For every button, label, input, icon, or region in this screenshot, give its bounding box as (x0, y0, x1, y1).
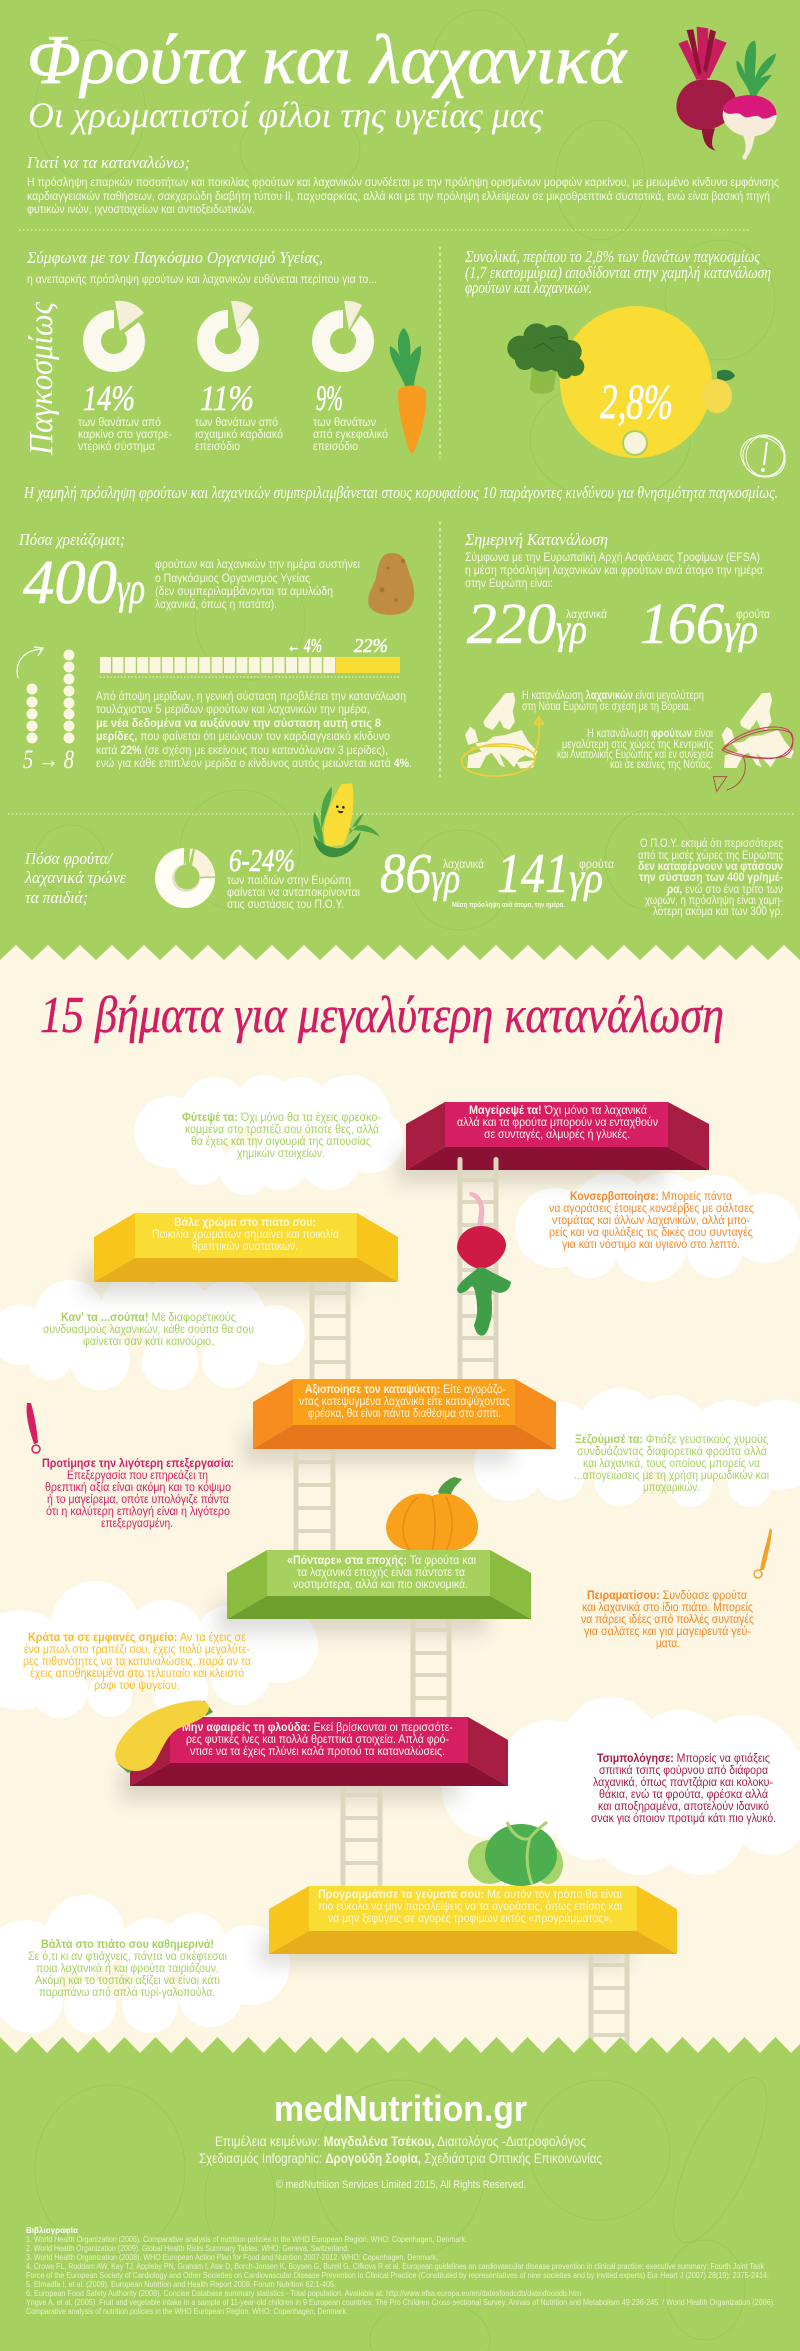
caption 14%: ντερικό σύστημα (78, 439, 155, 453)
cloud: juice (474, 1388, 800, 1507)
platform: keep the skin: Μην αφαιρείς τη φλούδα: Εκεί βρίσκονται οι περισσότε- (182, 1722, 453, 1734)
text: less processing: επεξεργασμένη. (101, 1518, 173, 1530)
map text: vegetables (522, 688, 704, 713)
footer: brand: medNutrition.gr (274, 2088, 527, 2129)
platform: colour on plate: Βάλε χρώμα στο πιάτο σου: (174, 1217, 316, 1229)
icon: broccoli (507, 323, 584, 394)
text: snack: Τσιμπολόγησε: Μπορείς να φτιάξεις (597, 1753, 770, 1765)
text: experiment: για σαλάτες και για μαγειρευτά γεύ- (584, 1626, 751, 1638)
recommendation text: ο Παγκόσμιος Οργανισμός Υγείας (155, 571, 310, 585)
stat 220 g vegetables (467, 591, 607, 656)
portions paragraph: ενώ για κάθε επιπλέον μερίδα ο κίνδυνος αυτός μειώνεται κατά 4%. (96, 756, 412, 770)
text: preserve (549, 1191, 754, 1251)
stat 86 g vegetables: 86 (380, 843, 431, 905)
icon: beet and radish (676, 27, 777, 160)
small note: Μέση πρόσληψη ανά άτομο, την ημέρα. (452, 901, 565, 909)
bibliography: Comparative analysis of nutrition policies in the WHO European Region. WHO: Copenhagen, Denmark. (26, 2307, 348, 2316)
text: plant them: θα έχεις και την σιγουριά της απουσίας (191, 1136, 371, 1148)
recommendation text (155, 557, 360, 611)
platform: plan meals: Προγραμμάτισε τα γεύματά σου: Με αυτόν τον τρόπο θα είναι (318, 1889, 622, 1901)
text: experiment: ματα. (656, 1638, 680, 1650)
heading: Πόσα φρούτα/ (24, 849, 114, 868)
text: less processing: Προτίμησε την λιγότερη επεξεργασία: (42, 1458, 234, 1470)
intro paragraph: φυτικών ινών, ιχνοστοιχείων και αντιοξειδωτικών. (27, 202, 255, 216)
text: plant them: κομμένα στο τραπέζι σου όποτε θες, αλλά (185, 1124, 379, 1136)
stat 2,8%: 2,8% (600, 373, 673, 429)
stat 220 g vegetables: 220 (467, 591, 556, 656)
icon: pumpkin (386, 1477, 478, 1552)
text: soup: συνδυασμούς λαχανικών, κάθε σούπα θα σου (43, 1324, 254, 1336)
map text: fruit (557, 726, 713, 771)
caption children: στις συστάσεις του Π.Ο.Υ. (227, 897, 344, 911)
icon: curved arrow (17, 647, 43, 678)
caption 14%: των θανάτων από (78, 415, 161, 429)
intro text (465, 550, 763, 590)
panel: WHO global burden (23, 248, 426, 456)
cloud: keep visible (0, 1581, 318, 1718)
platform: cook: σε συνταγές, αλμυρές ή γλυκές. (484, 1129, 630, 1141)
intro paragraph (27, 175, 779, 216)
stat 166 g fruit: γρ (724, 607, 758, 653)
heading (24, 849, 126, 907)
text: snack: σπιτικά τσιπς φούρνου από διάφορα (599, 1765, 768, 1777)
bibliography: 5. Elmadfa I, et al. (2009). European Nutrition and Health Report 2009. Forum Nutrition 62:1-405. (26, 2280, 336, 2289)
yellow circle chart (560, 306, 712, 458)
text: juice: μπαχαρικών. (643, 1482, 700, 1494)
platform: freezer (253, 1379, 556, 1449)
portions paragraph: κατά 22% (σε σχέση με εκείνους που κατανάλωναν 3 μερίδες), (96, 743, 388, 757)
caption 11%: των θανάτων από (195, 415, 278, 429)
intro text: η μέση πρόσληψη λαχανικών και φρούτων ανά άτομο την ημέρα (465, 563, 763, 577)
text: experiment: Πειραματίσου: Συνδύασε φρούτα (587, 1590, 747, 1602)
stat 86 g vegetables: λαχανικά (443, 857, 484, 871)
footer: credits (199, 2133, 602, 2166)
platform: colour on plate: θρεπτικών συστατικών. (192, 1241, 298, 1253)
WHO estimate text (638, 836, 783, 918)
stat 166 g fruit: φρούτα (736, 607, 770, 621)
text: on the plate daily: Σε ό,τι κι αν φτιάχνεις, πάντα να σκέφτεσαι (28, 1951, 227, 1963)
stat 400 g: 400 (23, 549, 117, 617)
text: snack: λαχανικά, όπως παντζάρια και κολοκυ- (593, 1777, 773, 1789)
ladder 4 (410, 1608, 452, 1718)
stat 166 g fruit: 166 (640, 591, 724, 656)
portions paragraph: μερίδες, που φαίνεται ότι μειώνουν τον καρδιαγγειακό κίνδυνο (96, 729, 390, 743)
recommendation text: φρούτων και λαχανικών την ημέρα συστήνει (155, 557, 360, 571)
text: soup: Καν' τα ...σούπα! Με διαφορετικούς (61, 1312, 236, 1324)
portions paragraph: Από άποψη μερίδων, η γενική σύσταση προβλέπει την κατανάλωση (96, 689, 406, 703)
label: 22%: 22% (354, 635, 388, 657)
caption 11%: επεισόδιο (195, 439, 240, 453)
text: less processing: ότι η καλύτερη επιλογή είναι η λιγότερο (46, 1506, 230, 1518)
donut 9% (321, 301, 365, 363)
icon: lemon (702, 370, 735, 413)
title: Φρούτα και λαχανικά (27, 22, 627, 99)
cloud: plant them (134, 1075, 403, 1195)
text: preserve: να αγοράσεις έτοιμες κονσέρβες με σάλτσες (549, 1203, 754, 1215)
label: minus 4%: ← 4% (287, 635, 322, 657)
text: preserve: ρείς και να φυλάξεις τις δικές σου συνταγές (549, 1227, 753, 1239)
ladder 5 (340, 1772, 382, 1887)
text: plant them: χημικών στοιχείων. (237, 1148, 325, 1160)
caption 14% (78, 415, 172, 453)
caption children (227, 873, 360, 911)
stat 86 g vegetables (380, 843, 484, 905)
icon: carrot (390, 328, 426, 453)
stat 166 g fruit (640, 591, 770, 656)
platform: plan meals: να μην ξεφύγεις σε αγορές τροφίμων εκτός «προγράμματος». (328, 1913, 612, 1925)
text: less processing: Επεξεργασία που επηρεάζει τη (67, 1470, 208, 1482)
panel: current consumption (461, 530, 794, 792)
bibliography: Βιβλιογραφία (26, 2225, 79, 2235)
text: soup (43, 1312, 254, 1348)
steps section: clouds, platforms and ladders (0, 1075, 800, 2055)
panel: 2.8% of deaths (464, 247, 792, 485)
text: on the plate daily: παραπάνω από απλά τυρί-γαλοπούλα. (39, 1987, 215, 1999)
stat 86 g vegetables: γρ (431, 856, 460, 902)
stat 6-24%: 6-24% (229, 842, 295, 878)
stat 141 g fruit: φρούτα (579, 857, 614, 871)
vertical word: Παγκοσμίως (23, 302, 60, 456)
map text: fruit: μεγαλύτερη στις χώρες της Κεντρικής (562, 737, 713, 751)
text: plant them (182, 1112, 381, 1160)
subtitle: Οι χρωματιστοί φίλοι της υγείας μας (28, 95, 543, 135)
icon: corn (313, 783, 380, 857)
heading: why eat them: Γιατί να τα καταναλώνω; (26, 153, 190, 172)
stat 141 g fruit: γρ (569, 856, 603, 902)
footer green background with zigzag (0, 2037, 800, 2351)
text: snack: και αποξηραμένα, αποτελούν ιδανικό (598, 1801, 769, 1813)
platform: cook (406, 1102, 709, 1170)
stat 141 g fruit: 141 (497, 843, 569, 905)
stat 400 g: γρ (117, 564, 145, 613)
icon: potato (368, 553, 414, 615)
subheading: η ανεπαρκής πρόσληψη φρούτων και λαχανικών ευθύνεται περίπου για το... (27, 272, 377, 286)
caption 11%: ισχαιμικό καρδιακό (195, 427, 283, 441)
background vegetable line art (35, 10, 775, 930)
panel: how much is needed (17, 530, 414, 774)
statement (464, 247, 771, 297)
platform: keep the skin (130, 1717, 508, 1786)
map text: fruit: Η κατανάλωση φρούτων είναι (587, 726, 713, 740)
progress bar (100, 657, 401, 677)
text: experiment: και λαχανικά στο ίδιο πιάτο. Μπορείς (582, 1602, 753, 1614)
ladder 3 (294, 1440, 336, 1552)
text: less processing (42, 1458, 234, 1530)
stat 9%: 9% (316, 378, 343, 418)
icon: scribbled exclamation (734, 429, 792, 485)
platform: seasonal (227, 1550, 531, 1619)
footer: copyright: © medNutrition Services Limited 2015, All Rights Reserved. (276, 2179, 526, 2191)
text: juice: συνδυάζοντας διαφορετικά φρούτα αλλά (577, 1446, 767, 1458)
ladder 1 (458, 1157, 498, 1381)
recommendation text: λαχανικά, όπως η πατάτα). (155, 597, 277, 611)
platform: seasonal: νοστιμότερα, αλλά και πιο οικονομικά. (293, 1579, 468, 1591)
WHO estimate text: ρα, ενώ στο ένα τρίτο των (667, 882, 783, 896)
caption 9%: των θανάτων (313, 415, 376, 429)
heading: Πόσα χρειάζομαι; (18, 530, 125, 549)
map: south Europe vegetables (461, 693, 543, 778)
text: keep visible: ρες πιθανότητες να τα καταναλώσεις, παρά αν τα (23, 1656, 251, 1668)
donut 14% (92, 301, 144, 363)
text: preserve: ντομάτας και άλλων λαχανικών, αλλά μπο- (552, 1215, 750, 1227)
text: plant them: Φύτεψέ τα: Όχι μόνο θα τα έχεις φρεσκο- (182, 1112, 381, 1124)
map: central and east Europe fruit (713, 693, 794, 792)
caption 14%: καρκίνο στο γαστρε- (78, 427, 172, 441)
cloud: preserve (515, 1173, 800, 1282)
caption 9%: επεισόδιο (313, 439, 358, 453)
ladder 2 (310, 1270, 350, 1382)
text: less processing: θρεπτική αξία είναι ακόμη και το κόψιμο (45, 1482, 231, 1494)
text: snack: σνακ για όποιον προτιμά κάτι πιο γλυκό. (591, 1813, 776, 1825)
text: on the plate daily: ποια λαχανικά ή και φρούτα ταιριάζουν. (36, 1963, 219, 1975)
intro text: Σύμφωνα με την Ευρωπαϊκή Αρχή Ασφάλειας Τροφίμων (EFSA) (465, 550, 760, 564)
bibliography: 3. World Health Organization (2008). WHO European Action Plan for Food and Nutrition 2007-2012. WHO: Copenhagen, Denmark. (26, 2253, 438, 2262)
caption 9% (313, 415, 388, 453)
footer: credits: Επιμέλεια κειμένων: Μαγδαλένα Τσέκου, Διαιτολόγος -Διατροφολόγος (215, 2133, 586, 2149)
panel: children (24, 783, 783, 918)
platform: freezer: Αξιοποίησε τον καταψύκτη: Είτε αγοράζο- (305, 1384, 506, 1396)
footer line art (35, 2066, 785, 2351)
platform: plan meals (269, 1886, 677, 1954)
cloud: soup (0, 1277, 305, 1390)
platform: colour on plate: Ποικιλία χρωμάτων σημαίνει και ποικιλία (152, 1229, 339, 1241)
stat 11%: 11% (200, 378, 254, 418)
green top background with zigzag edge (0, 0, 800, 960)
text: experiment (581, 1590, 754, 1650)
bibliography: 2. World Health Organization (2009). Global Health Risks Summary Tables. WHO: Geneva, Switzerland. (26, 2244, 349, 2253)
bibliography: 1. World Health Organization (2006). Comparative analysis of nutrition policies in the WHO European Region. WHO: Copenhagen, Denmark. (26, 2235, 467, 2244)
text: juice: και λαχανικά, τους οποίους μπορείς να (583, 1458, 760, 1470)
platform: seasonal: «Πόνταρε» στα εποχής: Τα φρούτα και (287, 1555, 476, 1567)
icon: yellow squash (115, 1700, 213, 1773)
platform: seasonal: τα λαχανικά εποχής είναι πάντοτε τα (297, 1567, 465, 1579)
platform: cook: αλλά και τα φρούτα μπορούν να ενταχθούν (457, 1117, 658, 1129)
platform: plan meals: πιο εύκολο να μην παραλείψεις να τα αγοράσεις, όπως επίσης και (318, 1901, 622, 1913)
map text: fruit: και Ανατολικής Ευρώπης και εν συνεχεία (557, 747, 713, 761)
ladder 6 (588, 1943, 630, 2055)
footer: credits: Σχεδιασμός Infographic: Δρογούδη Σοφία, Σχεδιάστρια Οπτικής Επικοινωνίας (199, 2150, 602, 2166)
map text: vegetables: στη Νότια Ευρώπη σε σχέση με τη Βόρεια. (522, 699, 691, 713)
caption 9%: από εγκεφαλικό (313, 427, 388, 441)
text: keep visible: έχεις αποθηκευμένα στο τελευταίο και κλειστό (30, 1668, 244, 1680)
caption children: των παιδιών στην Ευρώπη (227, 873, 351, 887)
platform: freezer: ντας κατεψυγμένα λαχανικά είτε καταψύχοντας (299, 1396, 510, 1408)
heading: Σύμφωνα με τον Παγκόσμιο Οργανισμό Υγείας, (26, 248, 323, 267)
icon: pink exclamation mark (27, 1403, 40, 1453)
text: snack (591, 1753, 776, 1825)
dots: 5 portions (26, 684, 38, 744)
text: juice (574, 1434, 769, 1494)
icon: radish on ladder (457, 1192, 511, 1336)
text: on the plate daily: Ακόμη και το τοστάκι αξίζει να είναι κάτι (35, 1975, 220, 1987)
label: 5 to 8: 5 → 8 (23, 745, 74, 774)
caption 11% (195, 415, 283, 453)
dots: 8 portions (64, 650, 74, 744)
platform: cook: Μαγείρεψέ τα! Όχι μόνο τα λαχανικά (469, 1105, 647, 1117)
heading: Σημερινή Κατανάλωση (464, 530, 608, 549)
stat 220 g vegetables: λαχανικά (566, 607, 607, 621)
text: preserve: για κάτι νόστιμο και υγιεινό στο λεπτό. (562, 1239, 740, 1251)
recommendation text: (δεν συμπεριλαμβάνονται τα αμυλώδη (155, 584, 333, 598)
heading: λαχανικά τρώνε (24, 868, 126, 887)
caption children: φαίνεται να ανταποκρίνονται (227, 885, 360, 899)
icon: cabbage (468, 1822, 563, 1886)
text: keep visible (23, 1632, 251, 1692)
portions paragraph: με νέα δεδομένα να αυξάνουν την σύσταση αυτή στις 8 (96, 716, 381, 730)
platform: keep the skin: ρες φυτικές ίνες και πολλά θρεπτικά στοιχεία. Απλά φρό- (186, 1734, 449, 1746)
map text: fruit: και σε εκείνες της Νότιας. (610, 757, 713, 771)
heading: τα παιδιά; (25, 888, 88, 907)
stat 14%: 14% (83, 378, 135, 418)
text: juice: Ξεζούμισέ τα: Φτιάξε γευστικούς χυμούς (575, 1434, 768, 1446)
text: keep visible: ράφι του ψυγείου. (94, 1680, 180, 1692)
donut 11% (206, 301, 253, 363)
portions paragraph: τουλάχιστον 5 μερίδων φρούτων και λαχανικών την ημέρα, (96, 702, 370, 716)
bibliography: 6. European Food Safety Authority (2008). Concise Database summary statistics - Total population. Available at: http://www.efsa.europa.eu/en/datexfoodcdb/datexfooddb.htm (26, 2289, 581, 2298)
stat 220 g vegetables: γρ (556, 607, 587, 653)
map text: vegetables: Η κατανάλωση λαχανικών είναι μεγαλύτερη (522, 688, 704, 702)
platform: freezer: φρέσκα, θα είναι πάντα διαθέσιμα στο σπίτι. (308, 1408, 501, 1420)
text: keep visible: Κράτα τα σε εμφανές σημείο: Αν τα έχεις σε (28, 1632, 246, 1644)
text: snack: θάκια, ενώ τα φρούτα, φρέσκα αλλά (599, 1789, 768, 1801)
text: juice: ...απογειώσεις με τη χρήση μυρωδικών και (574, 1470, 769, 1482)
text: keep visible: ένα μπωλ στο τραπέζι σου, έχεις πολύ μεγαλύτε- (24, 1644, 250, 1656)
text: on the plate daily: Βάλτα στο πιάτο σου καθημερινά! (41, 1939, 214, 1951)
text: less processing: ή το μαγείρεμα, οπότε υπολόγιζε πάντα (47, 1494, 229, 1506)
platform shadows (84, 1150, 666, 1965)
text: soup: φαίνεται σαν κάτι καινούριο. (83, 1336, 214, 1348)
text: on the plate daily (28, 1939, 227, 1999)
intro text: στην Ευρώπη είναι: (465, 576, 553, 590)
statement: φρούτων και λαχανικών. (465, 278, 592, 297)
platform: colour on plate (94, 1213, 398, 1282)
cloud: snack (442, 1697, 800, 1875)
cloud: on the plate (0, 1895, 290, 2033)
text: preserve: Κονσερβοποίησε: Μπορείς πάντα (570, 1191, 732, 1203)
portions paragraph (96, 689, 412, 770)
bibliography (26, 2225, 775, 2316)
text: experiment: να πάρεις ιδέες από πολλές συνταγές (581, 1614, 754, 1626)
platform: keep the skin: ντισε να τα έχεις πλύνει καλά προτού τα καταναλώσεις. (190, 1746, 445, 1758)
icon: orange exclamation mark (754, 1528, 772, 1578)
donut: children (155, 848, 215, 908)
